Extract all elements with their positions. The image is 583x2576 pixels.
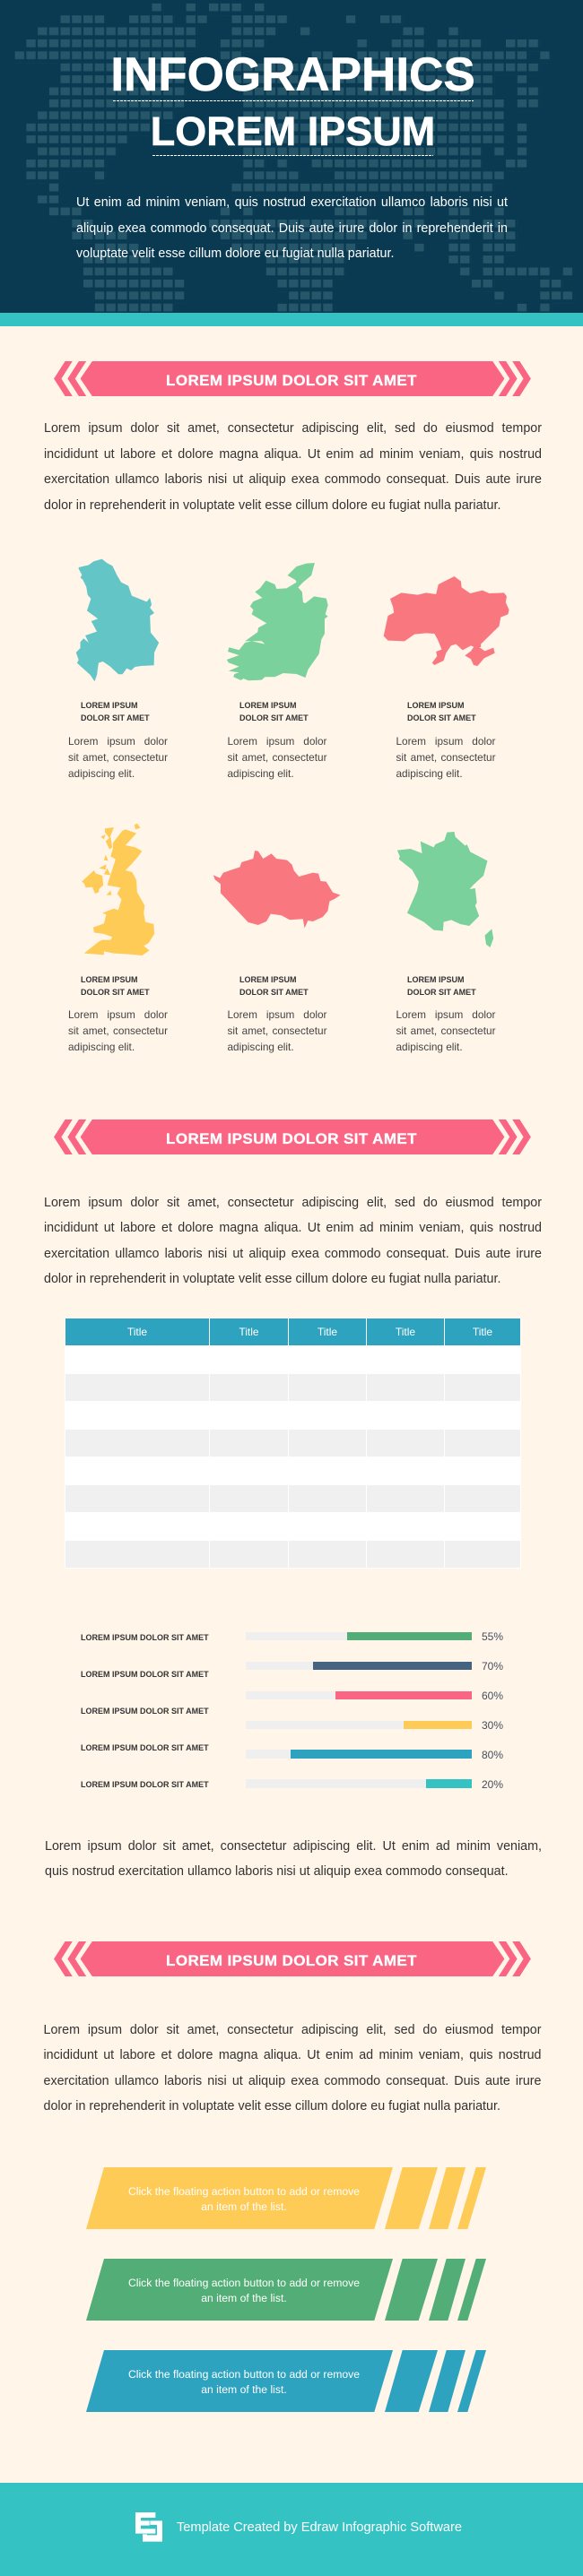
intro paragraph 1: exercitation ullamco laboris nisi ut aliquip exea commodo consequat. Duis aute irure — [44, 472, 542, 487]
text block 3 — [396, 735, 495, 780]
slanted callout: yellow: an item of the list. — [201, 2200, 287, 2212]
map: ukraine — [384, 576, 509, 666]
bar 20% — [246, 1779, 472, 1788]
slanted callout: blue: Click the floating action button to add or remove — [128, 2368, 360, 2381]
header paragraph: voluptate velit esse cillum dolore eu fugiat nulla pariatur. — [76, 246, 394, 261]
intro paragraph 2: dolor in reprehenderit in voluptate velit esse cillum dolore eu fugiat nulla pariatur. — [44, 1272, 500, 1286]
map: united kingdom — [82, 823, 154, 955]
text block 2 — [228, 735, 326, 780]
value 80%: 80% — [482, 1749, 503, 1761]
value 20%: 20% — [482, 1778, 503, 1791]
text block 1: Lorem ipsum dolor — [68, 735, 168, 748]
text block 4: adipiscing elit. — [68, 1041, 135, 1053]
chart caption paragraph: Lorem ipsum dolor sit amet, consectetur adipiscing elit. Ut enim ad minim veniam, — [45, 1839, 542, 1854]
text block 5: adipiscing elit. — [228, 1041, 294, 1053]
text block 1: adipiscing elit. — [68, 767, 135, 780]
label block 6: DOLOR SIT AMET — [407, 988, 476, 997]
text block 5: sit amet, consectetur — [228, 1024, 326, 1037]
slanted callout: blue — [86, 2350, 486, 2412]
map: teal region — [75, 559, 160, 681]
intro paragraph 3 — [43, 2022, 542, 2114]
pixel world map background — [14, 4, 572, 312]
chart caption paragraph — [45, 1839, 542, 1879]
intro paragraph 3: dolor in reprehenderit in voluptate velit esse cillum dolore eu fugiat nulla pariatur. — [43, 2099, 500, 2114]
label block 4: DOLOR SIT AMET — [81, 988, 150, 997]
title: infographics: INFOGRAPHICS — [110, 48, 475, 100]
header panel — [0, 0, 583, 313]
text block 1 — [68, 735, 168, 780]
text block 4: sit amet, consectetur — [68, 1024, 168, 1037]
bar label 4: LOREM IPSUM DOLOR SIT AMET — [81, 1743, 209, 1752]
label block 1 — [81, 701, 150, 722]
value 30%: 30% — [482, 1719, 503, 1732]
text block 1: sit amet, consectetur — [68, 751, 168, 764]
intro paragraph 3: incididunt ut labore et dolore magna aliqua. Ut enim ad minim veniam, quis nostrud — [43, 2048, 542, 2062]
label block 2 — [239, 701, 309, 722]
label block 1: LOREM IPSUM — [81, 701, 138, 710]
text block 4: Lorem ipsum dolor — [68, 1008, 168, 1021]
text block 3: Lorem ipsum dolor — [396, 735, 495, 748]
data table: Title — [127, 1326, 147, 1338]
data table: Title — [318, 1326, 337, 1338]
section banner 2 — [54, 1119, 531, 1154]
data table: Title — [239, 1326, 259, 1338]
label block 6 — [407, 975, 476, 997]
text block 6 — [396, 1008, 495, 1053]
value 70%: 70% — [482, 1660, 503, 1673]
text block 2: adipiscing elit. — [228, 767, 294, 780]
slanted callout: green: an item of the list. — [201, 2291, 287, 2304]
intro paragraph 1 — [44, 421, 542, 513]
label block 5: DOLOR SIT AMET — [239, 988, 309, 997]
intro paragraph 1: incididunt ut labore et dolore magna aliqua. Ut enim ad minim veniam, quis nostrud — [44, 446, 542, 461]
intro paragraph 3: exercitation ullamco laboris nisi ut aliquip exea commodo consequat. Duis aute irure — [43, 2074, 542, 2088]
label block 3 — [407, 701, 476, 722]
intro paragraph 3: Lorem ipsum dolor sit amet, consectetur adipiscing elit, sed do eiusmod tempor — [43, 2022, 542, 2036]
label block 6: LOREM IPSUM — [407, 975, 465, 984]
value 60%: 60% — [482, 1690, 503, 1702]
intro paragraph 2: Lorem ipsum dolor sit amet, consectetur adipiscing elit, sed do eiusmod tempor — [44, 1196, 542, 1210]
intro paragraph 1: Lorem ipsum dolor sit amet, consectetur adipiscing elit, sed do eiusmod tempor — [44, 421, 542, 436]
section banner 1 — [54, 361, 531, 396]
label block 2: DOLOR SIT AMET — [239, 713, 309, 722]
teal band — [0, 313, 583, 326]
data table: Title — [473, 1326, 492, 1338]
text block 3: adipiscing elit. — [396, 767, 463, 780]
slanted callout: blue: an item of the list. — [201, 2382, 287, 2395]
bar 55% — [246, 1632, 472, 1640]
bar chart — [81, 1630, 503, 1791]
label block 4 — [81, 975, 150, 997]
text block 2: sit amet, consectetur — [228, 751, 326, 764]
intro paragraph 2: exercitation ullamco laboris nisi ut aliquip exea commodo consequat. Duis aute irure — [44, 1246, 542, 1260]
intro paragraph 2 — [44, 1196, 542, 1286]
bar 60% — [246, 1691, 472, 1699]
text block 6: sit amet, consectetur — [396, 1024, 495, 1037]
label block 3: LOREM IPSUM — [407, 701, 465, 710]
slanted callout: green — [86, 2259, 486, 2321]
header paragraph: Ut enim ad minim veniam, quis nostrud exercitation ullamco laboris nisi ut — [76, 195, 508, 210]
text block 5: Lorem ipsum dolor — [228, 1008, 326, 1021]
section banner 2: LOREM IPSUM DOLOR SIT AMET — [166, 1129, 417, 1147]
section banner 3 — [54, 1941, 531, 1976]
value 55%: 55% — [482, 1630, 503, 1643]
bar 30% — [246, 1721, 472, 1729]
data table — [65, 1318, 521, 1569]
text block 4 — [68, 1008, 168, 1053]
bar label 2: LOREM IPSUM DOLOR SIT AMET — [81, 1670, 209, 1679]
footer panel — [0, 2483, 583, 2576]
map: france — [396, 832, 493, 947]
label block 4: LOREM IPSUM — [81, 975, 138, 984]
bar 80% — [246, 1750, 472, 1759]
label block 3: DOLOR SIT AMET — [407, 713, 476, 722]
section banner 3: LOREM IPSUM DOLOR SIT AMET — [166, 1952, 417, 1968]
map: czech republic — [213, 851, 341, 929]
label block 5 — [239, 975, 309, 997]
slanted callout: yellow: Click the floating action button to add or remove — [128, 2185, 360, 2198]
section banner 1: LOREM IPSUM DOLOR SIT AMET — [166, 371, 417, 389]
header paragraph: aliquip exea commodo consequat. Duis aute irure dolor in reprehenderit in — [76, 220, 508, 235]
intro paragraph 2: incididunt ut labore et dolore magna aliqua. Ut enim ad minim veniam, quis nostrud — [44, 1221, 542, 1235]
bar label 1: LOREM IPSUM DOLOR SIT AMET — [81, 1633, 209, 1642]
bar label 3: LOREM IPSUM DOLOR SIT AMET — [81, 1707, 209, 1716]
label block 5: LOREM IPSUM — [239, 975, 297, 984]
label block 2: LOREM IPSUM — [239, 701, 297, 710]
text block 2: Lorem ipsum dolor — [228, 735, 326, 748]
footer credit text: Template Created by Edraw Infographic Software — [177, 2520, 462, 2535]
bar label 5: LOREM IPSUM DOLOR SIT AMET — [81, 1780, 209, 1789]
label block 1: DOLOR SIT AMET — [81, 713, 150, 722]
bar 70% — [246, 1662, 472, 1670]
slanted callout: yellow — [86, 2167, 486, 2229]
data table: Title — [396, 1326, 415, 1338]
chart caption paragraph: quis nostrud exercitation ullamco laboris nisi ut aliquip exea commodo consequat. — [45, 1864, 509, 1879]
map: ireland — [226, 563, 328, 681]
subtitle: lorem ipsum: LOREM IPSUM — [151, 108, 435, 154]
slanted callout: green: Click the floating action button to add or remove — [128, 2277, 360, 2289]
header paragraph — [76, 195, 508, 261]
text block 5 — [228, 1008, 326, 1053]
intro paragraph 1: dolor in reprehenderit in voluptate velit esse cillum dolore eu fugiat nulla pariatur. — [44, 498, 500, 513]
text block 3: sit amet, consectetur — [396, 751, 495, 764]
icon: edraw logo — [135, 2512, 162, 2542]
text block 6: adipiscing elit. — [396, 1041, 463, 1053]
text block 6: Lorem ipsum dolor — [396, 1008, 495, 1021]
